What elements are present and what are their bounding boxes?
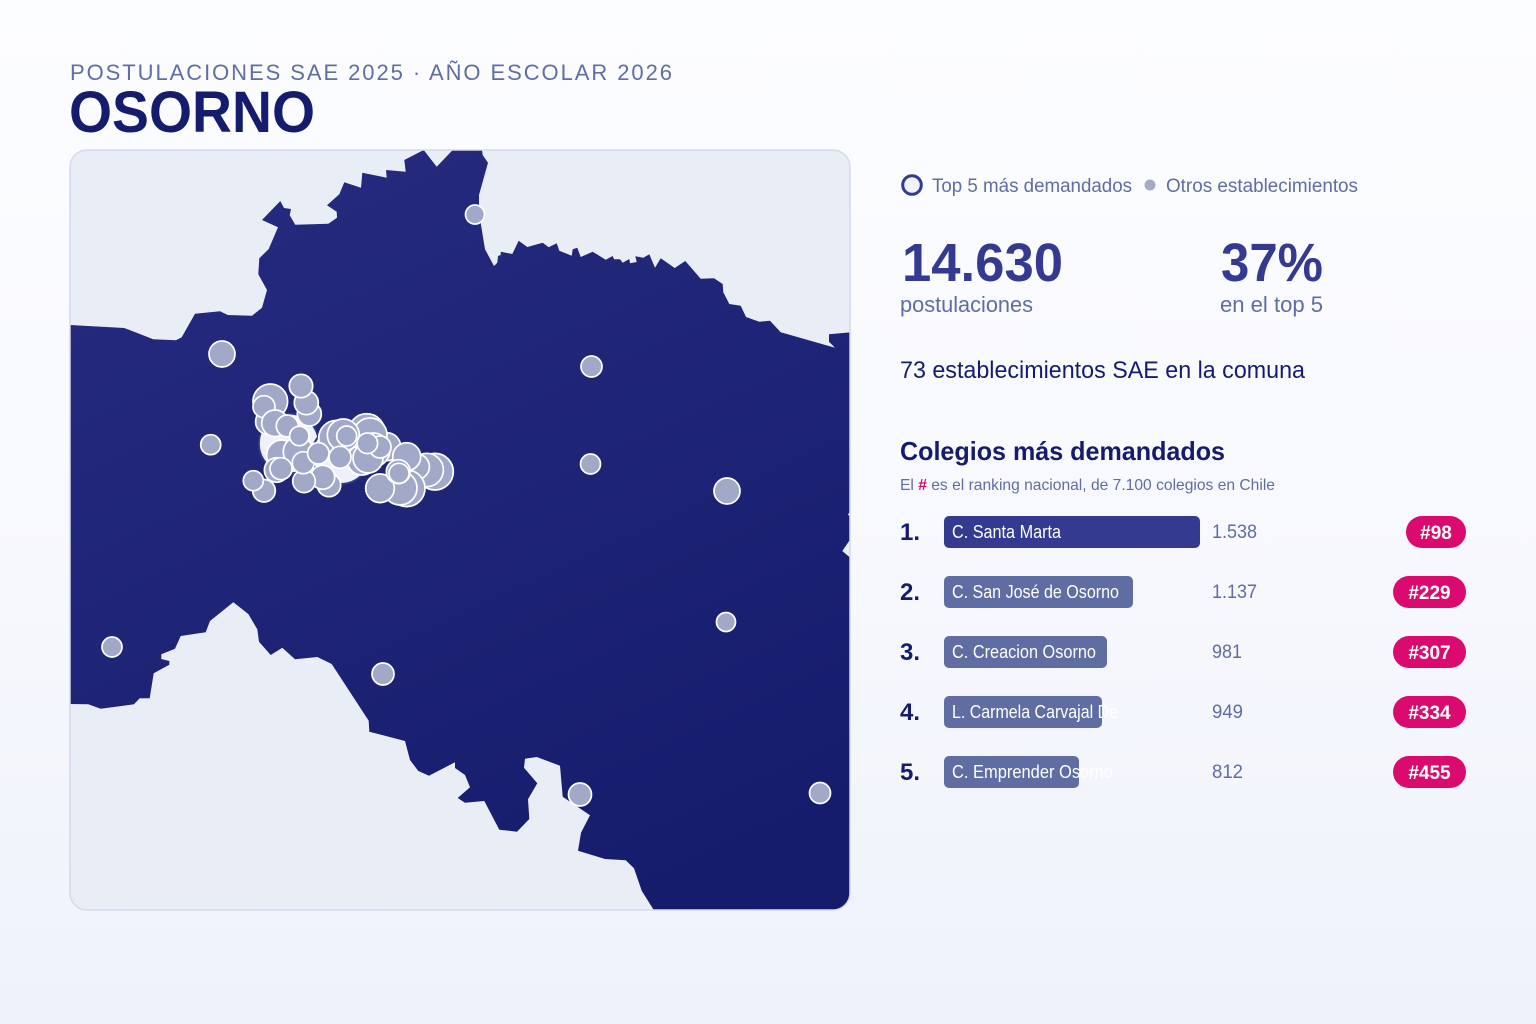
icon: other dot (1144, 180, 1156, 190)
row 3: C. Creacion Osorno (952, 642, 1096, 662)
stat: top 5 share: en el top 5 (1220, 292, 1323, 317)
row 4: 4. (900, 699, 920, 726)
row 5: 5. (900, 759, 920, 786)
stat: postulaciones: 14.630 (902, 233, 1063, 293)
row 1: C. Santa Marta (952, 522, 1062, 542)
map: comuna land shape (69, 150, 851, 911)
legend label: top 5: Top 5 más demandados (932, 176, 1132, 197)
stat: top 5 share (1220, 233, 1323, 317)
row 5: #455 (1408, 763, 1451, 784)
row 5 (900, 756, 1466, 788)
text: establishments count: 73 establecimientos SAE en la comuna (900, 357, 1306, 384)
row 2: 1.137 (1212, 582, 1257, 603)
bar chart: ranking (900, 516, 1466, 788)
row 2 (900, 576, 1466, 608)
row 2: #229 (1408, 583, 1451, 604)
map: other schools, urban cluster (243, 374, 453, 507)
row 4 (900, 696, 1466, 728)
stat: postulaciones (900, 233, 1063, 317)
row 2: 2. (900, 579, 920, 606)
heading: ranking: Colegios más demandados (900, 436, 1225, 466)
row 1: #98 (1420, 523, 1452, 544)
row 2: C. San José de Osorno (952, 582, 1119, 602)
row 3: 981 (1212, 642, 1242, 663)
row 1: 1. (900, 519, 920, 546)
map: other schools, rural (102, 205, 830, 806)
map: top 5 highlighted schools (259, 414, 370, 484)
legend label: others: Otros establecimientos (1166, 176, 1358, 197)
eyebrow text: POSTULACIONES SAE 2025 · AÑO ESCOLAR 2026 (70, 60, 672, 85)
legend (903, 176, 1358, 197)
header (69, 60, 672, 145)
row 1 (900, 516, 1466, 548)
row 4: 949 (1212, 702, 1243, 723)
row 1: 1.538 (1212, 522, 1257, 543)
stat: postulaciones: postulaciones (900, 292, 1033, 317)
row 3 (900, 636, 1466, 668)
row 4: L. Carmela Carvajal De (952, 702, 1118, 722)
ranking note: El # es el ranking nacional, de 7.100 colegios en Chile (900, 477, 1275, 494)
row 3: #307 (1408, 643, 1451, 664)
panel: map (69, 150, 851, 911)
icon: top 5 ring (903, 176, 921, 194)
title: OSORNO (69, 80, 315, 145)
row 3: 3. (900, 639, 920, 666)
row 5: C. Emprender Osorno (952, 762, 1113, 782)
row 5: 812 (1212, 762, 1243, 783)
row 4: #334 (1408, 703, 1451, 724)
stat: top 5 share: 37% (1221, 233, 1323, 293)
